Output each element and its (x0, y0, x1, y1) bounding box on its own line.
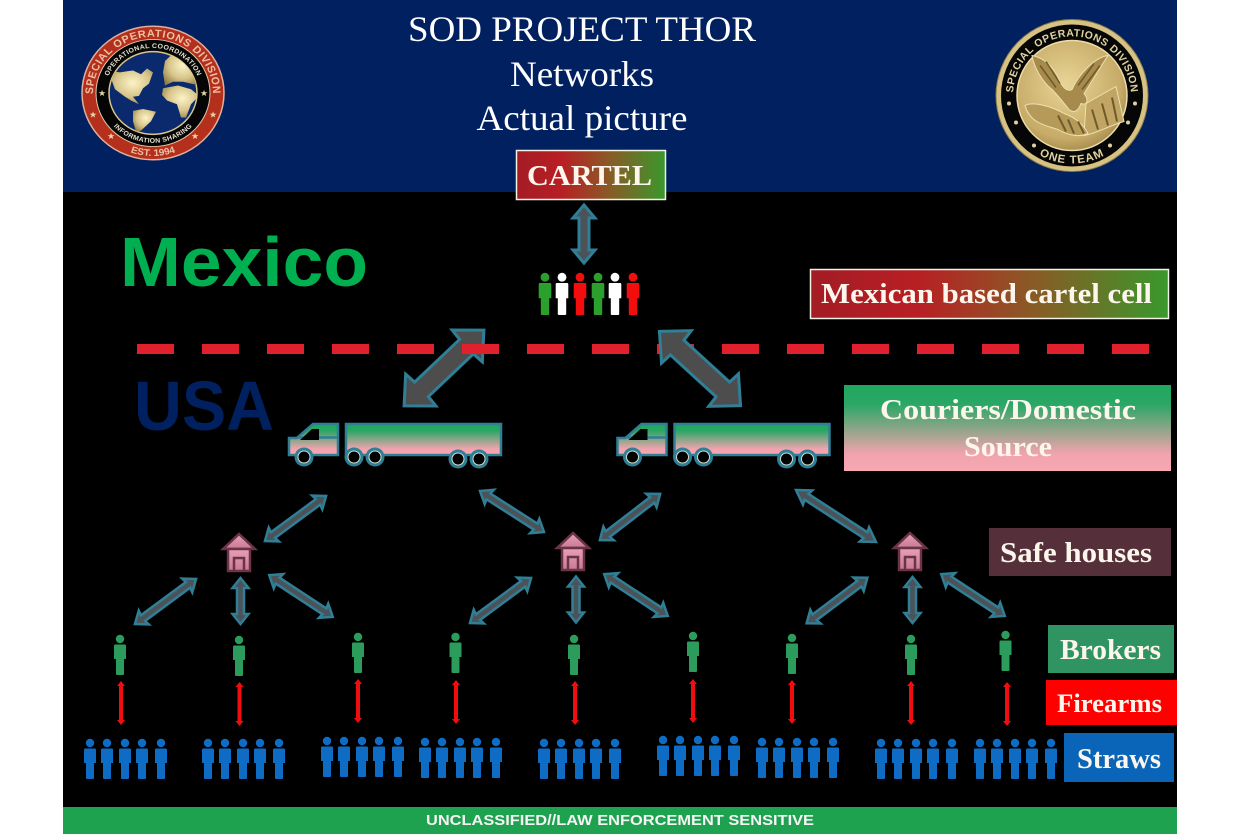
Mexican based cartel cell label (810, 270, 1168, 318)
cartel box: CARTEL (527, 160, 652, 192)
icon: operational coordination seal (81, 26, 225, 160)
title: Actual picture (476, 98, 688, 138)
icon: one team coin seal: SPECIAL OPERATIONS DIVISION (1006, 29, 1138, 92)
icon: operational coordination seal: ★ (89, 110, 97, 119)
brokers label: Brokers (1060, 634, 1161, 666)
USA label: USA (134, 367, 274, 445)
classification footer (63, 807, 1177, 834)
arrow: cartel to cell (573, 205, 595, 263)
couriers label (844, 385, 1171, 471)
icon: operational coordination seal: ★ (98, 88, 106, 98)
title: Networks (510, 54, 654, 94)
Mexican based cartel cell label: Mexican based cartel cell (821, 278, 1152, 310)
firearms label: Firearms (1057, 689, 1162, 718)
icon: operational coordination seal: ★ (200, 88, 208, 98)
firearms label (1046, 680, 1177, 725)
title: SOD PROJECT THOR (408, 9, 756, 49)
icon: operational coordination seal: ★ (191, 131, 199, 141)
icon: one team coin seal (996, 19, 1148, 172)
brokers people (114, 631, 1012, 676)
truck right (618, 424, 830, 468)
icon: operational coordination seal: ★ (209, 110, 217, 119)
cartel cell people (539, 273, 639, 315)
border dashed line (137, 344, 1149, 354)
arrows: trucks to safe houses (260, 483, 881, 549)
truck left (289, 424, 501, 468)
straws label (1064, 733, 1174, 782)
icon: operational coordination seal: OPERATIONAL COORDINATION (104, 43, 202, 76)
firearms arrows (117, 679, 1011, 726)
safe houses label: Safe houses (1000, 537, 1152, 569)
icon: operational coordination seal: ★ (107, 131, 115, 141)
arrow: cell to left truck (389, 314, 499, 422)
icon: operational coordination seal: INFORMATION SHARING (114, 124, 192, 143)
couriers label: Source (964, 431, 1052, 463)
Mexico label: Mexico (120, 223, 368, 301)
brokers label (1048, 625, 1174, 673)
icon: one team coin seal: ONE TEAM (1040, 148, 1104, 164)
title (408, 9, 756, 138)
straws people (84, 736, 1057, 779)
safe houses label (989, 528, 1171, 576)
classification footer: UNCLASSIFIED//LAW ENFORCEMENT SENSITIVE (426, 812, 814, 829)
safe house icons (223, 533, 926, 571)
arrow: cell to right truck (645, 315, 755, 422)
header banner (63, 0, 1177, 192)
arrows: safe houses to brokers (130, 567, 1009, 631)
icon: operational coordination seal: SPECIAL OPERATIONS DIVISION (85, 30, 221, 94)
straws label: Straws (1077, 743, 1161, 775)
icon: operational coordination seal: EST. 1994 (131, 146, 175, 156)
couriers label: Couriers/Domestic (880, 394, 1136, 426)
cartel box (516, 150, 666, 200)
